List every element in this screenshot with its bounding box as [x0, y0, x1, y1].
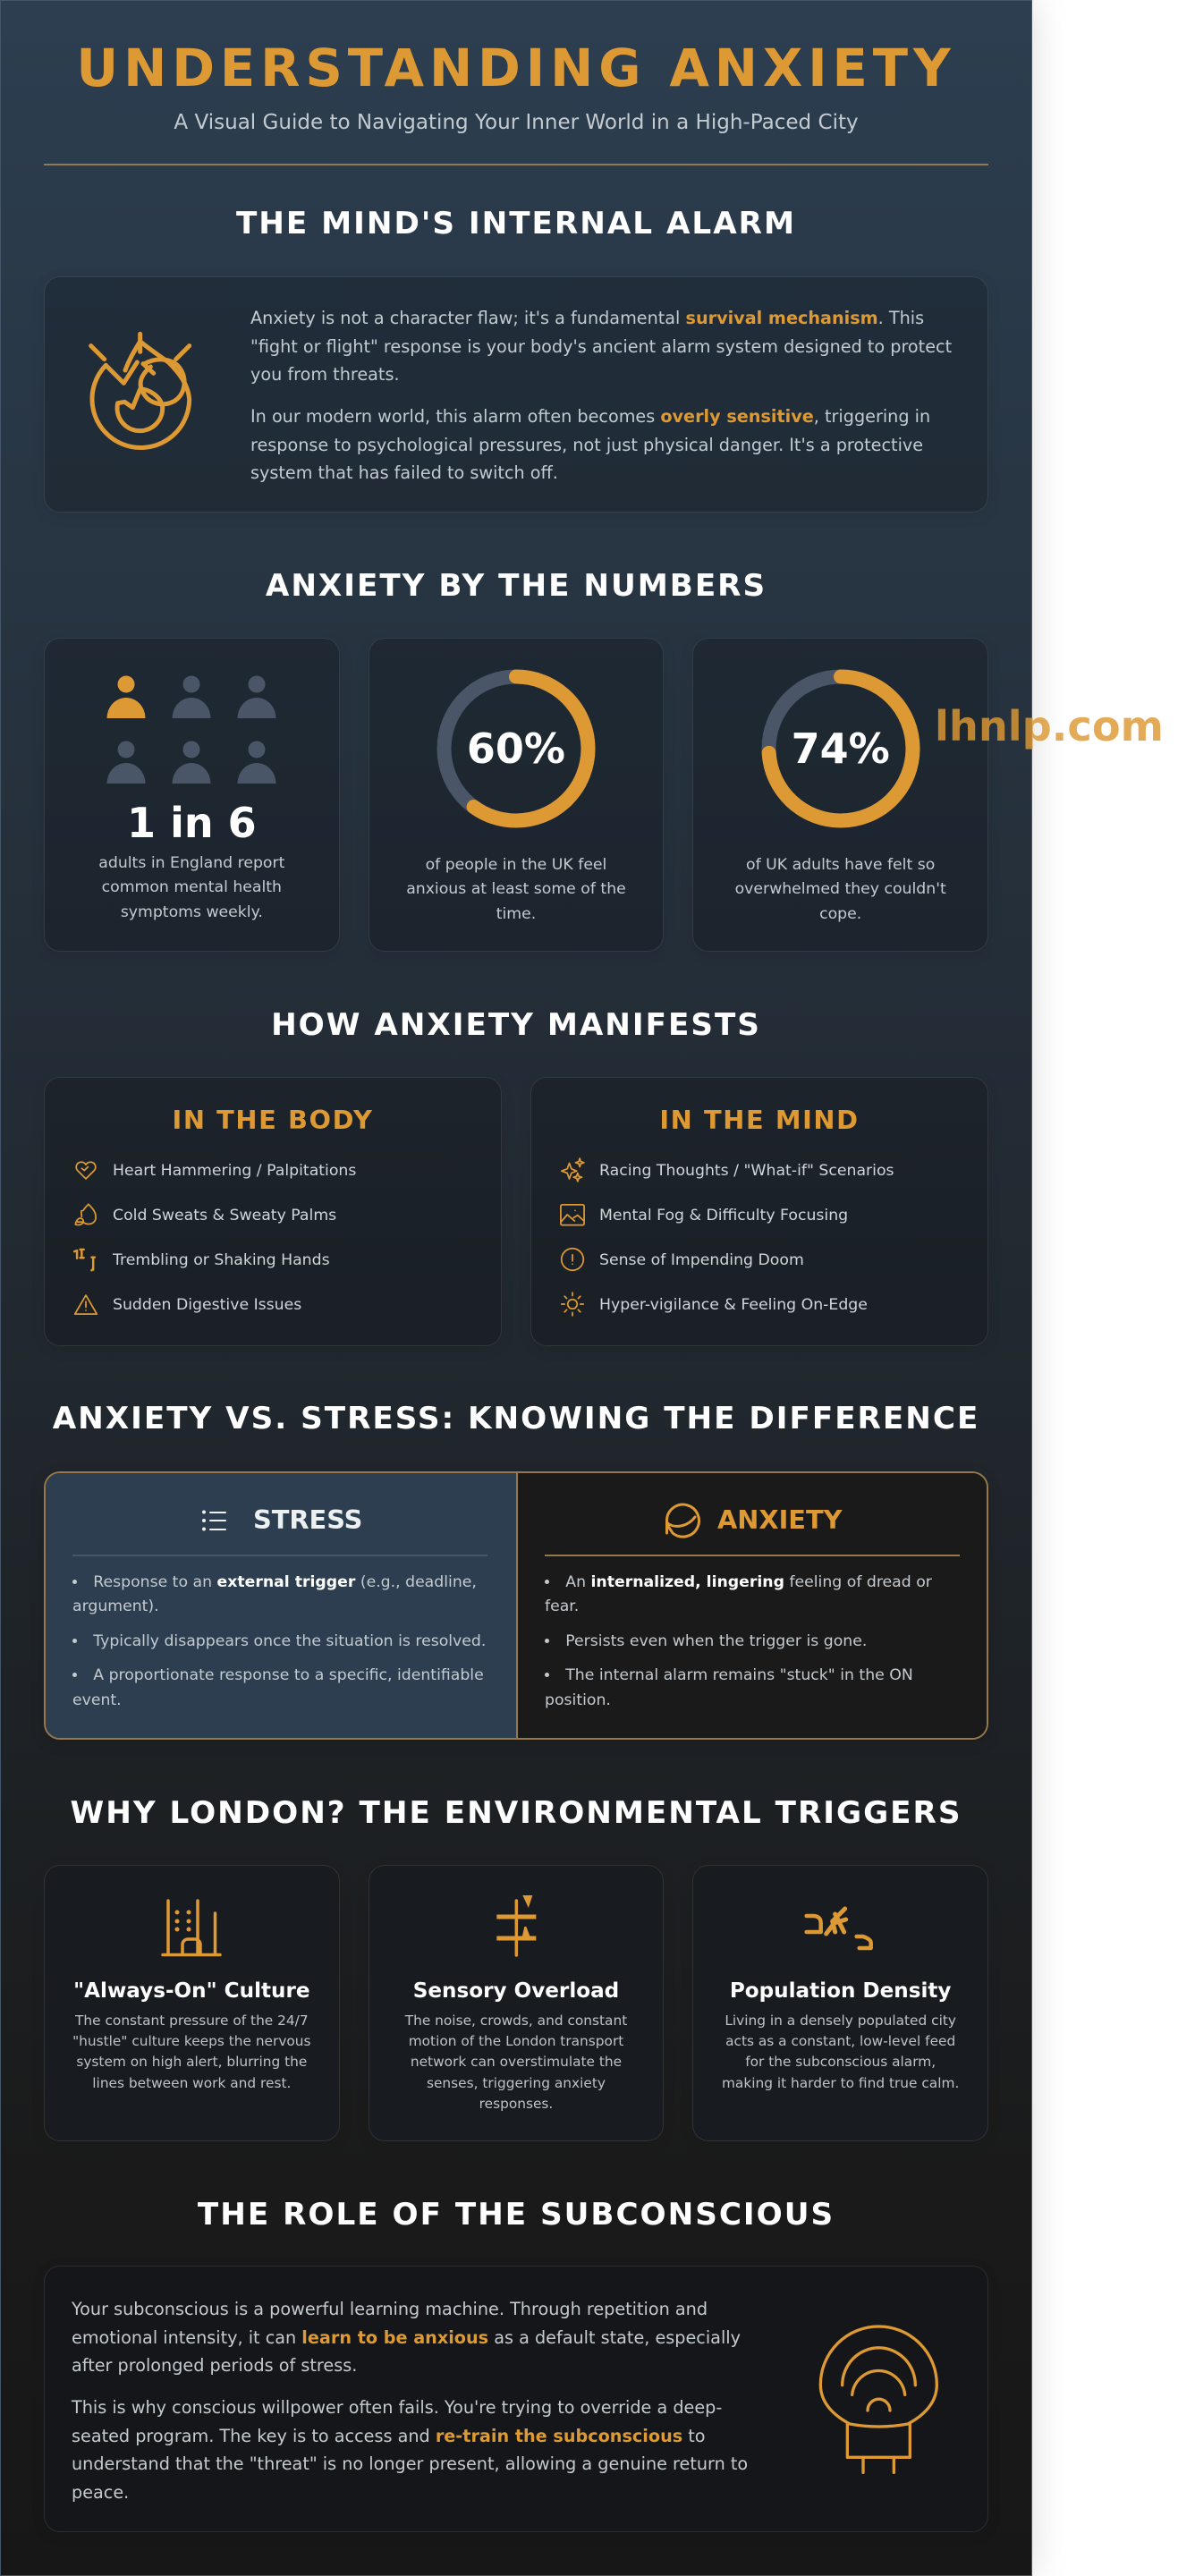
list: anxiety points: An internalized, lingering feeling of dread or fear.	[545, 1573, 932, 1615]
subtitle: A Visual Guide to Navigating Your Inner World in a High-Paced City	[174, 111, 859, 134]
list: stress points: Typically disappears once the situation is resolved.	[93, 1632, 486, 1650]
card text: The constant pressure of the 24/7	[75, 2012, 309, 2029]
list: stress points: A proportionate response to a specific, identifiable event.	[72, 1666, 484, 1709]
description: 60%: anxious at least some of the	[406, 880, 626, 898]
text: subconscious explanation	[72, 2299, 748, 2503]
panel: internal alarm	[44, 276, 988, 513]
icon: sun	[560, 1292, 585, 1317]
symptom: digestive: Sudden Digestive Issues	[113, 1296, 301, 1314]
panel: subconscious	[44, 2266, 988, 2532]
symptom: sweat	[75, 1203, 336, 1225]
text: alarm explanation: response to psychological pressures, not just physical danger. It's a protective	[250, 435, 923, 455]
list: stress points: Response to an external trigger (e.g., deadline, argument).	[72, 1573, 477, 1615]
card text: The noise, crowds, and constant	[405, 2012, 627, 2029]
title: UNDERSTANDING ANXIETY	[76, 38, 956, 98]
text: subconscious explanation: after prolonged periods of stress.	[72, 2355, 357, 2376]
panel: stat 74 percent	[692, 638, 988, 952]
divider	[545, 1555, 960, 1556]
description: 74%	[735, 856, 946, 923]
card text: system on high alert, blurring the	[76, 2054, 307, 2070]
description: 1 in 6: adults in England report	[98, 854, 284, 872]
text: alarm explanation: Anxiety is not a character flaw; it's a fundamental survival mechanism. This	[250, 308, 924, 328]
description: 60%: of people in the UK feel	[426, 856, 606, 874]
icon: crowd	[804, 1907, 873, 1950]
heading: role of the subconscious: THE ROLE OF THE SUBCONSCIOUS	[198, 2197, 835, 2233]
heading: why london: WHY LONDON? THE ENVIRONMENTAL TRIGGERS	[71, 1795, 962, 1831]
panel: stat 1 in 6	[44, 638, 340, 952]
text: alarm explanation: you from threats.	[250, 364, 400, 385]
icon: anxious face	[665, 1503, 701, 1538]
symptom: hyper-vigilance: Hyper-vigilance & Feeling On-Edge	[599, 1296, 868, 1314]
icon: list	[202, 1510, 226, 1531]
number: 74%: 74%	[792, 724, 890, 773]
symptom: heart: Heart Hammering / Palpitations	[113, 1162, 356, 1180]
card text	[72, 2012, 311, 2091]
symptom: impending doom: Sense of Impending Doom	[599, 1251, 804, 1269]
text: subconscious explanation: Your subconscious is a powerful learning machine. Through repetition and	[72, 2299, 708, 2319]
text: subconscious explanation: understand that the "threat" is no longer present, allowing a genuine return to	[72, 2453, 748, 2474]
number: 60%: 60%	[467, 724, 565, 773]
card text: "hustle" culture keeps the nervous	[72, 2033, 311, 2049]
symptom: trembling: Trembling or Shaking Hands	[113, 1251, 330, 1269]
symptom: racing thoughts	[560, 1157, 894, 1182]
card text	[404, 2012, 627, 2112]
icon: alert circle	[560, 1247, 585, 1272]
card text: network can overstimulate the	[411, 2054, 622, 2070]
text: subconscious explanation: emotional intensity, it can learn to be anxious as a default state, especially	[72, 2327, 741, 2348]
heading: anxiety: ANXIETY	[717, 1504, 842, 1535]
description: 74%: of UK adults have felt so	[746, 856, 935, 874]
text: alarm explanation: "fight or flight" response is your body's ancient alarm system designed to protect	[250, 336, 952, 357]
description: 60%: time.	[496, 905, 536, 923]
description: 74%: overwhelmed they couldn't	[735, 880, 946, 898]
text: subconscious explanation: seated program. The key is to access and re-train the subconscious to	[72, 2426, 706, 2446]
text: alarm explanation: system that has failed to switch off.	[250, 462, 558, 483]
header divider	[44, 164, 988, 165]
list: anxiety points	[545, 1573, 932, 1709]
card text	[722, 2012, 959, 2091]
text: subconscious explanation: This is why conscious willpower often fails. You're trying to override a deep-	[72, 2397, 722, 2418]
description: 1 in 6: symptoms weekly.	[121, 903, 263, 921]
symptom: mental fog: Mental Fog & Difficulty Focusing	[599, 1207, 848, 1224]
divider	[72, 1555, 487, 1556]
heading: in the body: IN THE BODY	[172, 1105, 373, 1135]
heading: stress: STRESS	[253, 1504, 362, 1535]
icon: sparkles	[560, 1157, 585, 1182]
icon grid: six people	[107, 676, 275, 784]
description: 1 in 6	[98, 854, 284, 921]
card text: responses.	[479, 2096, 553, 2112]
description: 74%: cope.	[819, 905, 861, 923]
card title: Sensory Overload	[413, 1979, 619, 2003]
symptom: impending doom	[560, 1247, 804, 1272]
icon: office building	[161, 1899, 222, 1957]
icon: sweat drop	[75, 1203, 97, 1225]
panel: in the body	[44, 1077, 502, 1346]
card text: lines between work and rest.	[92, 2075, 291, 2091]
divider: column separator	[516, 1473, 518, 1738]
icon: heart	[75, 1161, 97, 1180]
heading: how anxiety manifests: HOW ANXIETY MANIFESTS	[271, 1007, 761, 1043]
symptom: racing thoughts: Racing Thoughts / "What-if" Scenarios	[599, 1162, 894, 1180]
heading: anxiety by the numbers: ANXIETY BY THE NUMBERS	[266, 568, 767, 604]
text: subconscious explanation: peace.	[72, 2482, 129, 2503]
description: 60%	[406, 856, 626, 923]
icon: trembling hands	[73, 1249, 97, 1272]
list: stress points	[72, 1573, 486, 1709]
card text: Living in a densely populated city	[725, 2012, 956, 2029]
donut chart: 60%	[436, 669, 596, 828]
list: anxiety points: The internal alarm remains "stuck" in the ON position.	[545, 1666, 913, 1709]
card text: acts as a constant, low-level feed	[725, 2033, 955, 2049]
panel: stat 60 percent	[369, 638, 664, 952]
number: 1 in 6: 1 in 6	[127, 799, 257, 847]
card text: for the subconscious alarm,	[745, 2054, 936, 2070]
panel: in the mind	[530, 1077, 988, 1346]
watermark: lhnlp.com	[935, 702, 1164, 750]
panel: always-on culture	[44, 1865, 340, 2141]
column: stress	[46, 1473, 516, 1738]
panel: comparison	[44, 1471, 988, 1740]
symptom: trembling	[73, 1249, 330, 1272]
list: anxiety points: Persists even when the trigger is gone.	[565, 1632, 867, 1650]
symptom: sweat: Cold Sweats & Sweaty Palms	[113, 1207, 336, 1224]
column: anxiety	[516, 1473, 987, 1738]
icon: alarm flame	[89, 331, 191, 450]
icon: warning triangle	[73, 1294, 98, 1315]
card text: motion of the London transport	[409, 2033, 623, 2049]
description: 1 in 6: common mental health	[102, 878, 282, 896]
heading: in the mind: IN THE MIND	[659, 1105, 860, 1135]
card text: making it harder to find true calm.	[722, 2075, 959, 2091]
icon: transport signal	[496, 1895, 537, 1957]
text: alarm explanation	[250, 308, 952, 483]
text: alarm explanation: In our modern world, this alarm often becomes overly sensitive, triggering in	[250, 406, 930, 427]
card title: Population Density	[730, 1979, 951, 2003]
symptom: hyper-vigilance	[560, 1292, 868, 1317]
icon: head with signal waves	[819, 2325, 938, 2474]
card title: "Always-On" Culture	[73, 1979, 310, 2003]
heading: anxiety vs stress: ANXIETY VS. STRESS: KNOWING THE DIFFERENCE	[53, 1401, 979, 1436]
donut chart: 74%	[762, 669, 920, 828]
icon: picture frame	[560, 1204, 585, 1225]
heading: the mind's internal alarm: THE MIND'S INTERNAL ALARM	[236, 206, 796, 242]
panel: sensory overload	[369, 1865, 664, 2141]
panel: population density	[692, 1865, 988, 2141]
card text: senses, triggering anxiety	[427, 2075, 606, 2091]
